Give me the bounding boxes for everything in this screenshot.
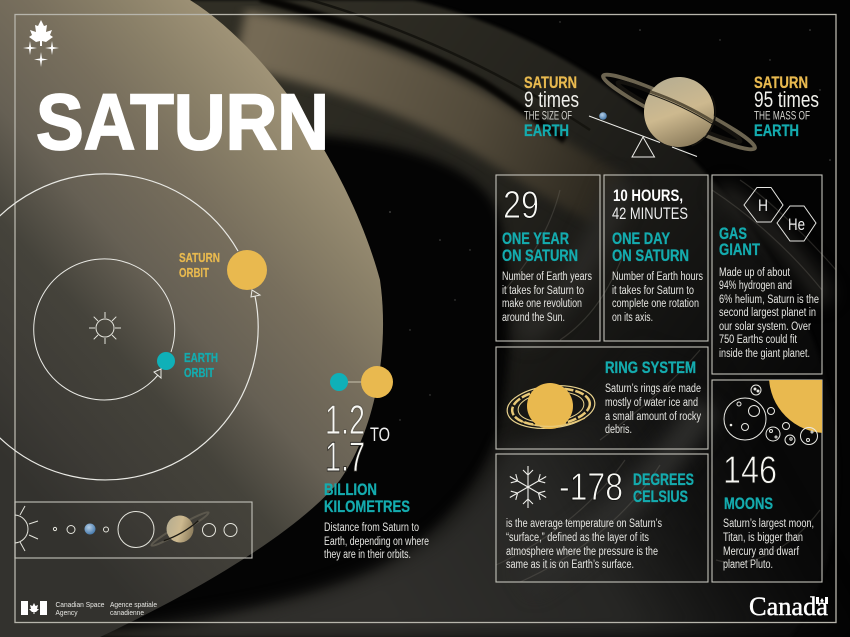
distance figures: 1.7 (325, 433, 365, 480)
day text: complete one rotation (612, 298, 699, 310)
distance figures: 1.2 (325, 396, 365, 443)
day text: Number of Earth hours (612, 271, 703, 283)
gas giant text: our solar system. Over (719, 321, 811, 333)
saturn orbit label (179, 251, 220, 280)
icon: hexagons: He (788, 215, 805, 234)
size text (524, 73, 579, 140)
icon: Canadian flag (21, 601, 47, 615)
icon: sun (89, 312, 121, 344)
year text (502, 271, 592, 324)
orbit diagram (0, 174, 267, 480)
distance heading: KILOMETRES (324, 497, 410, 516)
year figure: 29 (503, 184, 539, 227)
agency logo (21, 600, 157, 617)
distance heading (324, 480, 410, 516)
mass text: 95 times (754, 87, 819, 112)
gas giant text: second largest planet in (719, 307, 816, 319)
icon: Saturn (588, 44, 770, 180)
earth orbit arrow (154, 369, 161, 378)
icon: sun (15, 506, 38, 552)
year heading (502, 229, 578, 265)
gas giant text: 6% helium, Saturn is the (719, 294, 819, 306)
temperature heading: DEGREES (633, 470, 694, 489)
distance from Saturn to Earth (324, 366, 429, 561)
ring text: mostly of water ice and (605, 397, 698, 409)
distance heading: BILLION (324, 480, 377, 499)
icon: moons (724, 385, 818, 445)
moons text: Titan, is bigger than (723, 532, 803, 544)
icon: hexagons (744, 188, 816, 241)
moons figure: 146 (723, 449, 777, 492)
gas giant text (719, 267, 819, 360)
size text: THE SIZE OF (524, 110, 572, 122)
year text: make one revolution (502, 298, 582, 310)
size text: EARTH (524, 121, 569, 140)
mass text (754, 73, 819, 140)
saturn orbit label: ORBIT (179, 266, 209, 280)
icon: hexagons: H (758, 196, 768, 215)
distance icon (330, 366, 393, 398)
year text: around the Sun. (502, 312, 565, 324)
moons text: planet Pluto. (723, 559, 773, 571)
gas giant heading: GAS (719, 224, 747, 243)
day figure: 42 MINUTES (612, 204, 688, 223)
day heading (612, 229, 689, 265)
moons text (723, 518, 814, 571)
temperature text: is the average temperature on Saturn’s (506, 518, 662, 530)
temperature text (506, 518, 662, 571)
earth orbit label: ORBIT (184, 366, 214, 380)
day text: it takes for Saturn to (612, 285, 694, 297)
ring heading: RING SYSTEM (605, 358, 696, 377)
gas giant text: 750 Earths could fit (719, 334, 798, 346)
earth orbit label: EARTH (184, 351, 218, 365)
ring text: a small amount of rocky (605, 411, 701, 423)
moons text: Saturn’s largest moon, (723, 518, 814, 530)
agency name: Canadian Space (56, 600, 104, 609)
size text: SATURN (524, 73, 577, 92)
distance text: Distance from Saturn to (324, 522, 419, 534)
day figure (612, 186, 688, 223)
year text: it takes for Saturn to (502, 285, 584, 297)
saturn orbit label: SATURN (179, 251, 220, 265)
distance figures: TO (370, 425, 390, 446)
icon: snowflake (507, 466, 549, 508)
distance figures (325, 396, 390, 480)
icon: maple leaf with stars (23, 20, 59, 67)
distance text (324, 522, 429, 561)
year heading: ON SATURN (502, 246, 578, 265)
day figure: 10 HOURS, (613, 186, 683, 205)
agency name: canadienne (110, 608, 144, 617)
solar system strip (0, 501, 252, 558)
scale comparison: Saturn vs Earth (524, 44, 819, 180)
temperature text: atmosphere where the pressure is the (506, 546, 658, 558)
gas giant text: 94% hydrogen and (719, 280, 792, 292)
title: SATURN (36, 77, 329, 166)
day text (612, 271, 703, 324)
agency name: Agency (56, 608, 78, 617)
temperature text: “surface,” defined as the layer of its (506, 532, 649, 544)
ring text (605, 383, 701, 436)
distance text: Earth, depending on where (324, 536, 429, 548)
mass text: THE MASS OF (754, 110, 810, 122)
saturn marker (227, 250, 267, 290)
saturn orbit ring (0, 174, 258, 480)
year heading: ONE YEAR (502, 229, 569, 248)
see-saw beam and pivot (589, 116, 697, 157)
panel: moons (711, 379, 823, 583)
temperature heading: CELSIUS (633, 487, 688, 506)
ring text: debris. (605, 424, 632, 436)
size text: 9 times (524, 87, 579, 112)
saturn orbit arrow (251, 290, 260, 297)
gas giant text: Made up of about (719, 267, 791, 279)
moons heading: MOONS (724, 494, 773, 513)
day heading: ON SATURN (612, 246, 689, 265)
earth orbit label (184, 351, 218, 380)
year text: Number of Earth years (502, 271, 592, 283)
earth orbit ring (34, 259, 175, 400)
panel: gas giant (712, 175, 822, 374)
temperature figure: -178 (559, 466, 623, 509)
icon: planet limb (769, 380, 822, 433)
gas giant heading: GIANT (719, 240, 760, 259)
panel: ring system (496, 347, 708, 449)
agency name (56, 600, 157, 617)
temperature text: same as it is on Earth’s surface. (506, 559, 634, 571)
panel: one year (496, 175, 600, 341)
day text: on its axis. (612, 312, 653, 324)
ring text: Saturn’s rings are made (605, 383, 701, 395)
planet Saturn backdrop (0, 0, 383, 637)
mass text: EARTH (754, 121, 799, 140)
icon: ringed planet (505, 382, 597, 432)
icon: small Saturn (145, 501, 215, 557)
gas giant text: inside the giant planet. (719, 348, 810, 360)
agency name: Agence spatiale (110, 600, 157, 609)
day heading: ONE DAY (612, 229, 670, 248)
distance text: they are in their orbits. (324, 549, 411, 561)
icon: Earth (599, 112, 607, 120)
gas giant heading (719, 224, 760, 259)
mass text: SATURN (754, 73, 808, 92)
moons text: Mercury and dwarf (723, 546, 800, 558)
earth marker (157, 352, 175, 370)
temperature heading (633, 470, 694, 506)
panel: one day (604, 175, 708, 341)
planets (53, 512, 237, 548)
Canada wordmark: Canada (749, 592, 828, 621)
panel: temperature (496, 454, 708, 582)
